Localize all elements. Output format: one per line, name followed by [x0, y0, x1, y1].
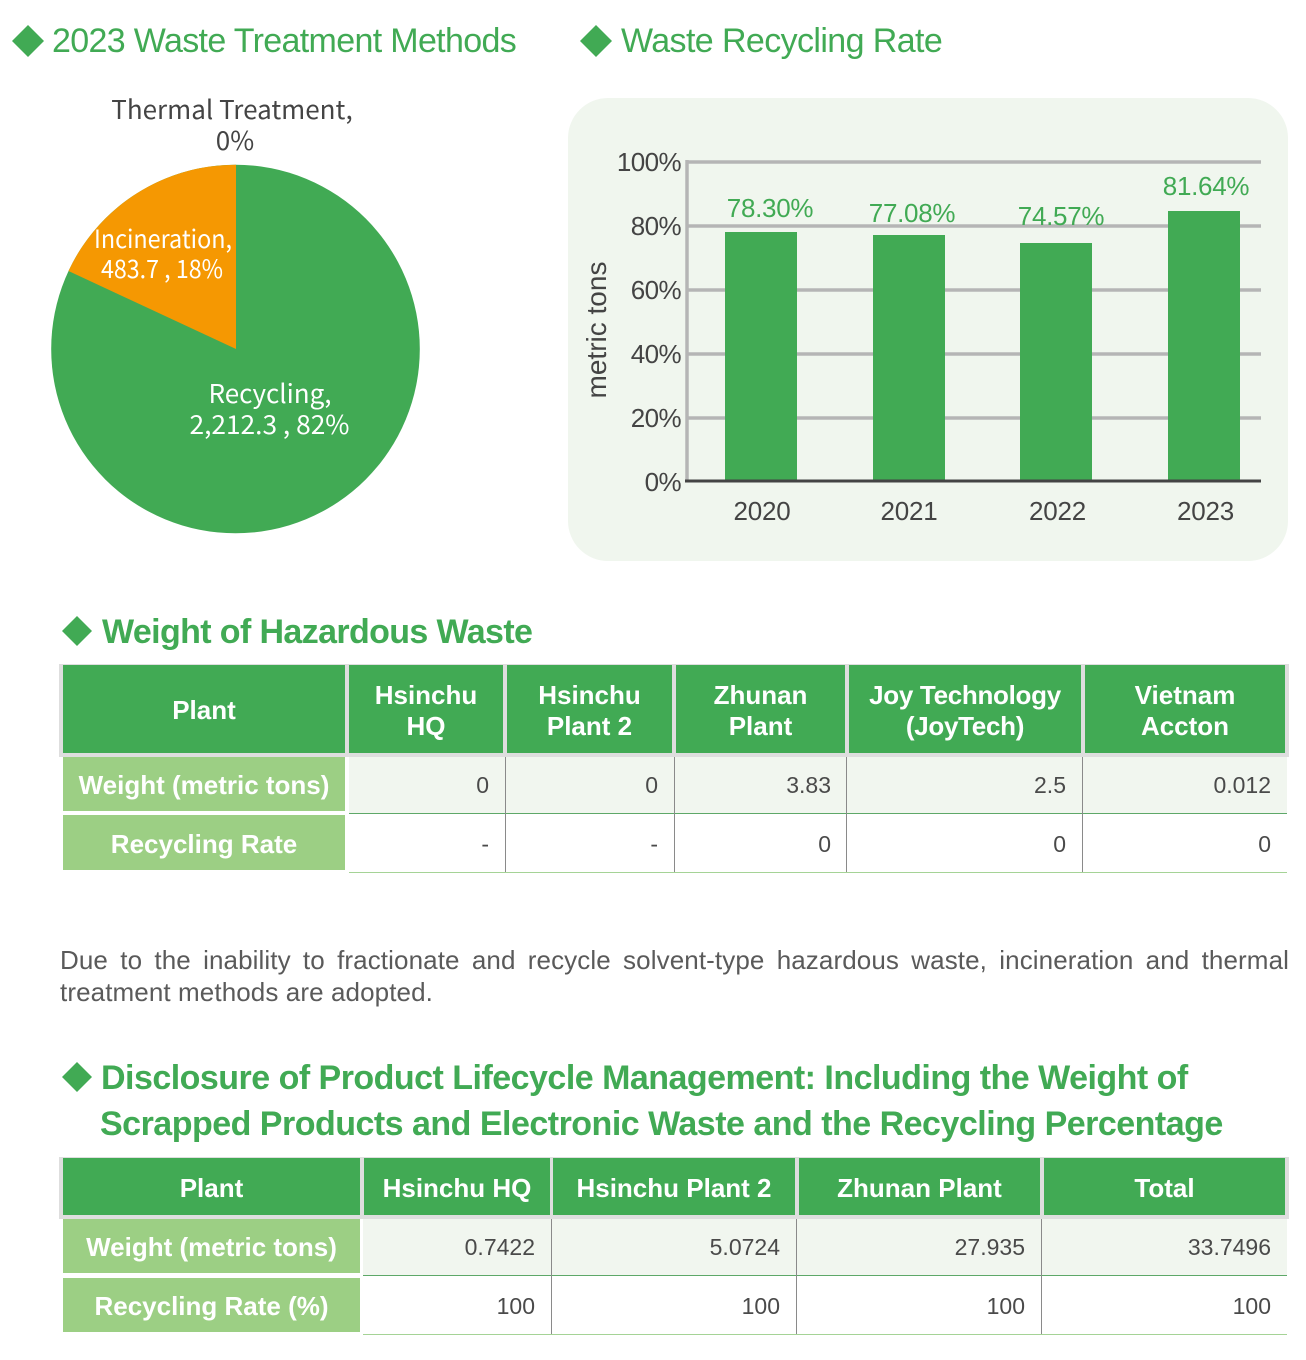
- panel: recycling rate chart background: [568, 98, 1288, 561]
- bar chart: waste recycling rate: 81.64%: [1163, 171, 1249, 201]
- bar chart: waste recycling rate: 100%: [617, 147, 681, 177]
- header cell: Total: Total: [1134, 1173, 1195, 1203]
- bar chart: waste recycling rate: [581, 147, 1261, 526]
- header cell: Zhunan Plant: [799, 1158, 1040, 1215]
- pie chart: waste treatment methods: 483.7 , 18%: [101, 250, 223, 286]
- row label: Recycling Rate: [63, 1278, 360, 1332]
- row values: recycling rate: 0: [1258, 831, 1271, 857]
- header cell: Vietnam Accton: [1085, 665, 1285, 753]
- row values: weight: 0: [645, 772, 658, 798]
- row values: weight: [465, 1234, 1271, 1260]
- row values: recycling rate: -: [650, 831, 658, 857]
- header cell: Plant: Plant: [172, 694, 236, 724]
- row values: recycling rate: 100: [987, 1293, 1025, 1319]
- bar chart: waste recycling rate: 80%: [631, 211, 681, 241]
- header cell: Hsinchu Plant 2: [553, 1158, 795, 1215]
- heading: Weight of Hazardous Waste: Weight of Hazardous Waste: [102, 613, 532, 651]
- row values: weight: [476, 772, 1271, 798]
- header cell: Zhunan Plant: Zhunan Plant: [837, 1173, 1002, 1203]
- header cell: Hsinchu HQ: Hsinchu HQ: [383, 1173, 531, 1203]
- bar chart: waste recycling rate: 0%: [645, 467, 681, 497]
- header cell: Hsinchu Plant 2: Hsinchu Plant 2: [576, 1173, 772, 1203]
- row values: recycling rate: 100: [1233, 1293, 1271, 1319]
- row values: weight: 0.012: [1213, 772, 1271, 798]
- text block: hazardous waste note: Due to the inability to fractionate and recycle solvent-type hazardous waste, incineration and thermal treatment methods are adopted.: [60, 945, 1289, 1007]
- row values: recycling rate: 100: [497, 1293, 535, 1319]
- header cell: Vietnam Accton: Vietnam: [1135, 680, 1235, 710]
- bar chart: waste recycling rate: 2022: [1029, 496, 1086, 526]
- header cell: Hsinchu HQ: [364, 1158, 550, 1215]
- pie chart: waste treatment methods: Thermal Treatment,: [111, 90, 353, 127]
- header cell: Plant: [63, 1158, 360, 1215]
- bar chart: waste recycling rate: 60%: [631, 275, 681, 305]
- bar chart: waste recycling rate: 2021: [880, 496, 938, 526]
- header cell: Hsinchu Plant 2: Hsinchu: [538, 680, 641, 710]
- header cell: Hsinchu HQ: HQ: [406, 711, 445, 741]
- table: scrapped products and electronic waste: [59, 1157, 1289, 1335]
- pie chart: waste treatment methods: 2,212.3 , 82%: [190, 405, 350, 442]
- header cell: Joy Technology: Joy Technology: [869, 680, 1061, 710]
- bar chart: waste recycling rate: 2023: [1177, 496, 1234, 526]
- row values: recycling rate: -: [481, 831, 489, 857]
- row values: recycling rate: [497, 1293, 1271, 1319]
- header cell: Plant: Plant: [180, 1173, 243, 1203]
- bar chart: waste recycling rate: 74.57%: [1018, 201, 1104, 231]
- row values: weight: 3.83: [786, 772, 831, 798]
- row values: recycling rate: 0: [1053, 831, 1066, 857]
- bar chart: waste recycling rate: 2020: [733, 496, 791, 526]
- heading: 2023 Waste Treatment Methods: 2023 Waste Treatment Methods: [52, 22, 516, 60]
- row values: weight: 2.5: [1034, 772, 1066, 798]
- table: hazardous waste weight: [59, 664, 1289, 873]
- row label: Recycling Rate: Recycling Rate (%): [94, 1290, 329, 1320]
- row values: recycling rate: 0: [818, 831, 831, 857]
- bar chart: waste recycling rate: metric tons: [581, 262, 612, 398]
- header cell: Zhunan Plant: Plant: [729, 711, 792, 741]
- row values: weight: 33.7496: [1188, 1234, 1271, 1260]
- pie chart: waste treatment methods: 0%: [216, 121, 254, 158]
- row label: Weight: Weight (metric tons): [86, 1232, 337, 1262]
- bar chart: waste recycling rate: 40%: [631, 339, 681, 369]
- pie chart: waste treatment methods: Recycling,: [208, 374, 332, 411]
- row values: recycling rate: 100: [742, 1293, 780, 1319]
- row label: Recycling Rate: Recycling Rate: [111, 829, 297, 859]
- header cell: Hsinchu Plant 2: [507, 665, 672, 753]
- header cell: Zhunan Plant: Zhunan: [714, 680, 807, 710]
- row label: Weight: [63, 1219, 360, 1273]
- header cell: Zhunan Plant: [676, 665, 845, 753]
- header cell: Hsinchu HQ: [349, 665, 503, 753]
- row label: Weight: [63, 757, 345, 811]
- header cell: Plant: [63, 665, 345, 753]
- heading: Disclosure of Product Lifecycle Management: Disclosure of Product Lifecycle Management: Including the Weight of: [101, 1059, 1188, 1097]
- heading: Waste Recycling Rate: Waste Recycling Rate: [621, 22, 942, 60]
- heading: Disclosure of Product Lifecycle Management: [62, 1059, 1223, 1143]
- header cell: Hsinchu Plant 2: Plant 2: [547, 711, 632, 741]
- row values: weight: 27.935: [955, 1234, 1025, 1260]
- header cell: Joy Technology: [849, 665, 1081, 753]
- row values: weight: 0: [476, 772, 489, 798]
- icon: diamond: [62, 616, 92, 646]
- bar chart: waste recycling rate: 20%: [631, 403, 681, 433]
- row label: Weight: Weight (metric tons): [79, 770, 329, 800]
- row values: recycling rate: [481, 831, 1271, 857]
- header cell: Total: [1044, 1158, 1285, 1215]
- header cell: Hsinchu HQ: Hsinchu: [375, 680, 477, 710]
- row values: weight: 0.7422: [465, 1234, 535, 1260]
- heading: Disclosure of Product Lifecycle Management: Scrapped Products and Electronic Waste and the Recycling Percentage: [100, 1105, 1223, 1143]
- icon: diamond: [62, 1062, 92, 1092]
- row values: weight: 5.0724: [710, 1234, 780, 1260]
- bar chart: waste recycling rate: 78.30%: [727, 193, 813, 223]
- icon: diamond: [12, 25, 44, 57]
- bar chart: waste recycling rate: 77.08%: [869, 198, 955, 228]
- row label: Recycling Rate: [63, 815, 345, 870]
- header cell: Vietnam Accton: Accton: [1141, 711, 1229, 741]
- icon: diamond: [580, 25, 612, 57]
- pie chart: waste treatment methods: Incineration,: [94, 220, 232, 256]
- pie chart: waste treatment methods: [51, 90, 420, 534]
- header cell: Joy Technology: (JoyTech): [906, 711, 1024, 741]
